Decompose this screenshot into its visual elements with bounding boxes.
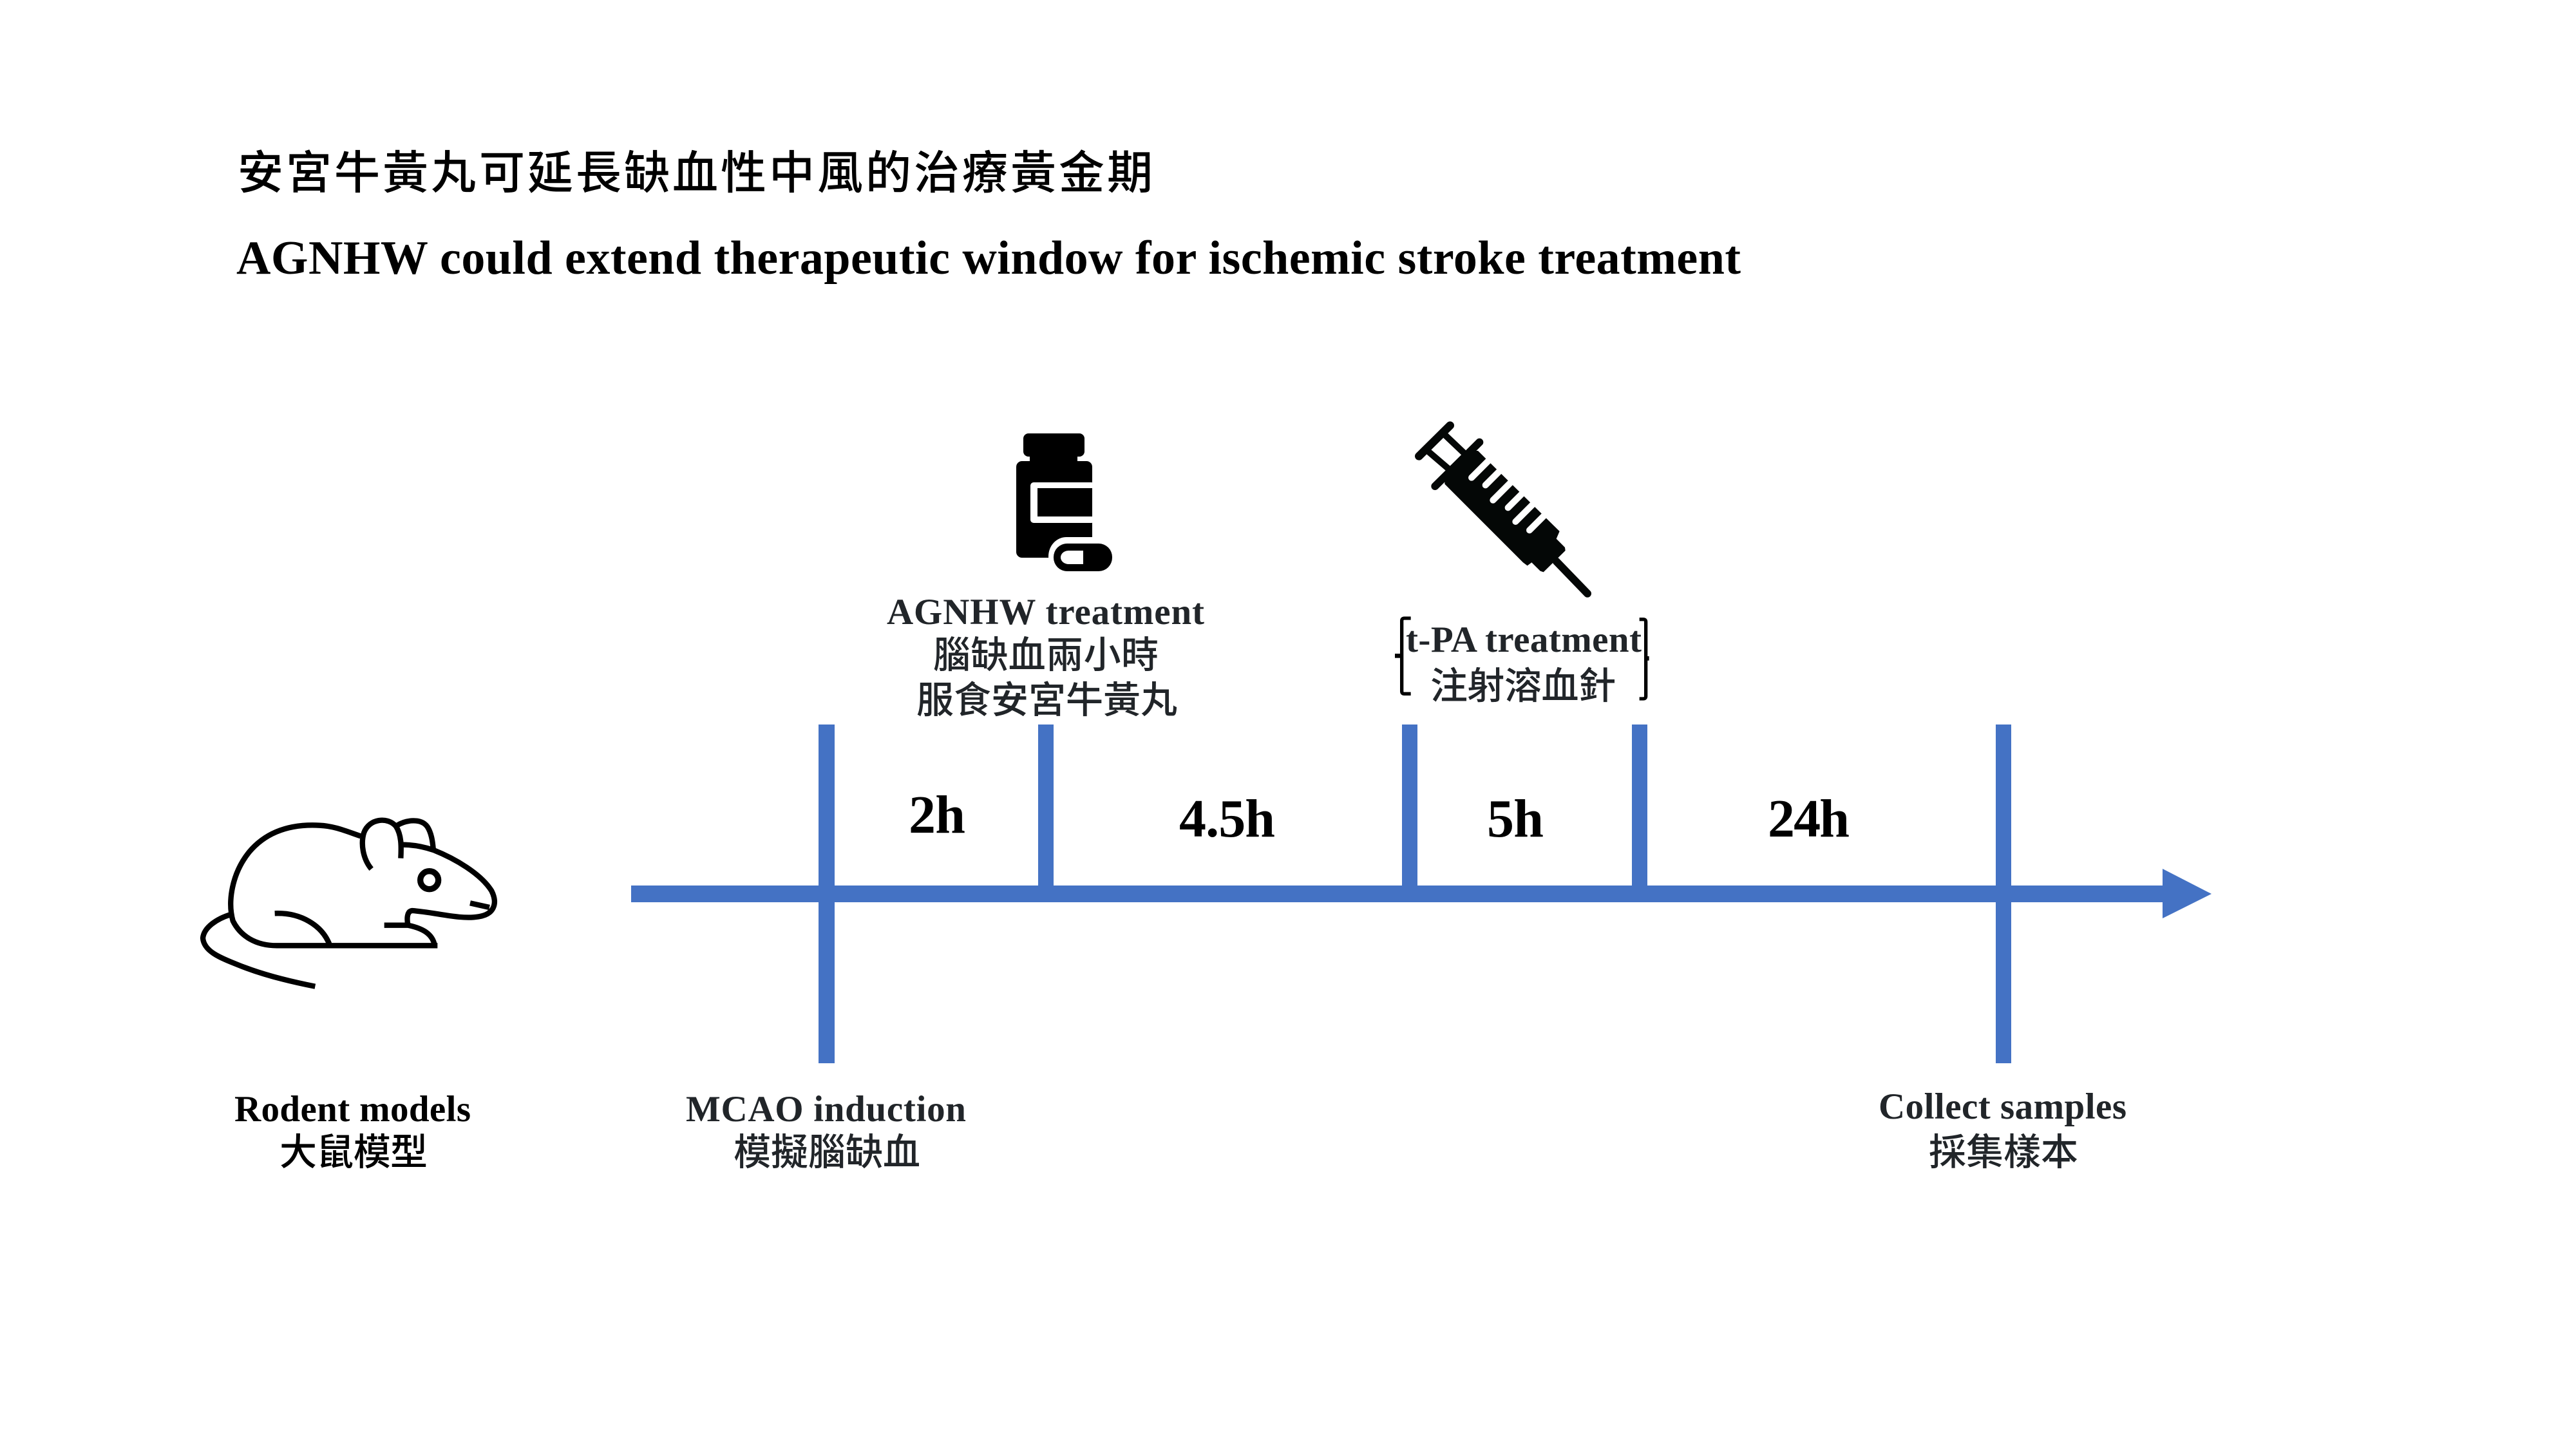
- label: MCAO induction: MCAO induction: [686, 1089, 966, 1130]
- label: Rodent models: [234, 1089, 471, 1173]
- label: AGNHW treatment: [887, 592, 1204, 721]
- label: Collect samples: Collect samples: [1879, 1086, 2126, 1127]
- label: AGNHW treatment: 服食安宮牛黃丸: [916, 679, 1178, 721]
- timeline: axis, ticks and arrow: [631, 724, 2211, 1063]
- label: t-PA treatment with brackets: [1395, 618, 1649, 707]
- label: AGNHW treatment: AGNHW treatment: [887, 592, 1204, 632]
- label: t-PA treatment with brackets: 注射溶血針: [1430, 665, 1616, 707]
- icon: rodent: [203, 820, 495, 987]
- icon: medicine bottle and pill: [1016, 433, 1119, 576]
- label: Rodent models: 大鼠模型: [279, 1132, 428, 1173]
- label: Collect samples: 採集樣本: [1929, 1132, 2078, 1173]
- icon: syringe: [1419, 426, 1587, 594]
- label: 24h: 24h: [1768, 789, 1850, 849]
- title: English: AGNHW could extend therapeutic window for ischemic stroke treatment: [236, 232, 1741, 285]
- title: Chinese: 安宮牛黃丸可延長缺血性中風的治療黃金期: [238, 148, 1153, 199]
- label: 4.5h: 4.5h: [1179, 789, 1275, 849]
- label: Rodent models: Rodent models: [234, 1089, 471, 1130]
- label: Collect samples: [1879, 1086, 2126, 1173]
- label: 2h: 2h: [909, 785, 965, 845]
- label: MCAO induction: [686, 1089, 966, 1173]
- label: t-PA treatment with brackets: t-PA treatment: [1406, 620, 1642, 660]
- label: MCAO induction: 模擬腦缺血: [734, 1132, 920, 1173]
- label: AGNHW treatment: 腦缺血兩小時: [933, 634, 1159, 676]
- label: 5h: 5h: [1487, 789, 1544, 849]
